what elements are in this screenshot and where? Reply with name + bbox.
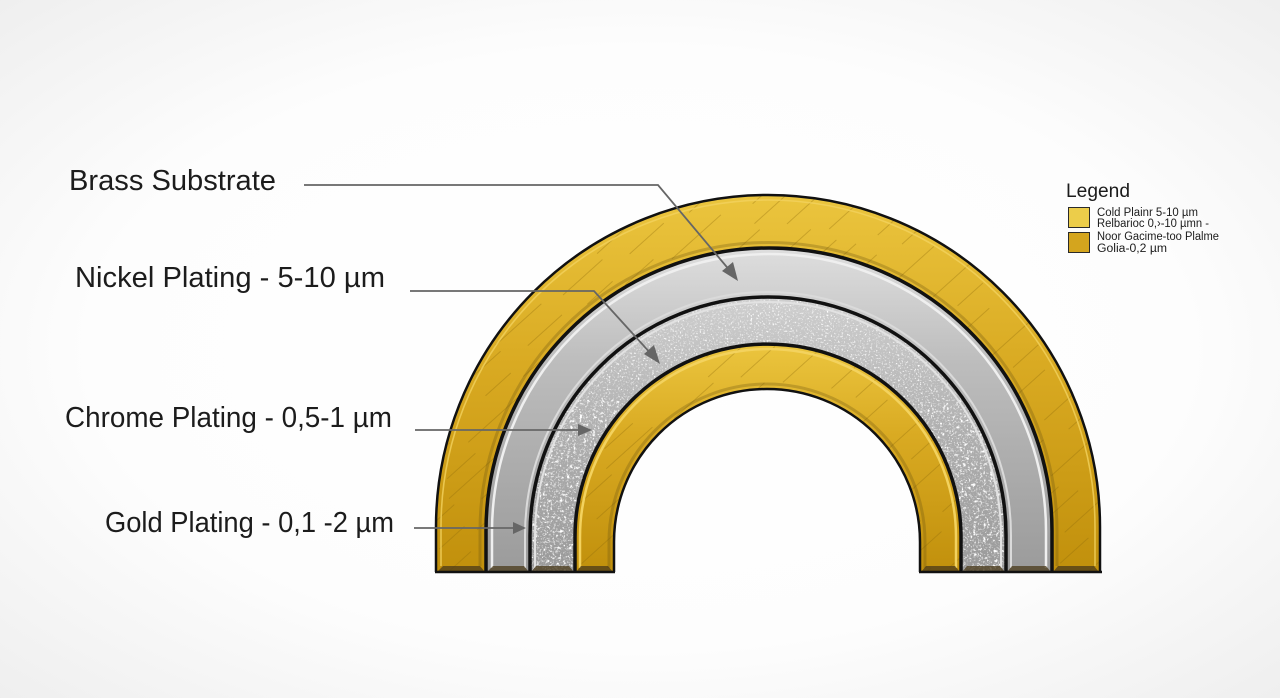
callout: brass substrate xyxy=(69,165,738,281)
diagram: layered plating arch xyxy=(435,195,1102,575)
arrow: nickel plating leader xyxy=(410,291,660,364)
legend text: Noor Gacime-too Plalme xyxy=(1097,231,1219,243)
callout: nickel plating xyxy=(75,262,660,364)
callout: nickel plating: Nickel Plating - 5-10 µm xyxy=(75,262,385,294)
layer outlines xyxy=(435,195,1102,572)
arrow: chrome plating leader xyxy=(415,424,592,436)
legend swatch: light gold xyxy=(1068,208,1090,228)
layer: inner gold band xyxy=(575,344,961,572)
arrow: gold plating leader xyxy=(414,522,526,534)
arrow: brass substrate leader xyxy=(304,185,738,281)
legend swatch: dark gold xyxy=(1068,232,1090,252)
callout: chrome plating: Chrome Plating - 0,5-1 µm xyxy=(65,402,392,434)
callout: gold plating: Gold Plating - 0,1 -2 µm xyxy=(105,507,394,539)
layer: outer gold band xyxy=(436,195,1100,572)
callout: brass substrate: Brass Substrate xyxy=(69,165,276,197)
legend text: Relbarioc 0,›-10 µmn - xyxy=(1097,218,1209,230)
legend text: Golia-0,2 µm xyxy=(1097,243,1167,255)
legend title: Legend xyxy=(1066,181,1130,202)
callout: chrome plating xyxy=(65,402,592,436)
layer: chrome speckled band xyxy=(525,290,1011,575)
legend xyxy=(1066,181,1219,255)
legend text: Cold Plainr 5-10 µm xyxy=(1097,207,1198,219)
layer: nickel steel band xyxy=(486,248,1052,572)
legend text xyxy=(1097,207,1219,255)
base shading xyxy=(437,566,1099,572)
